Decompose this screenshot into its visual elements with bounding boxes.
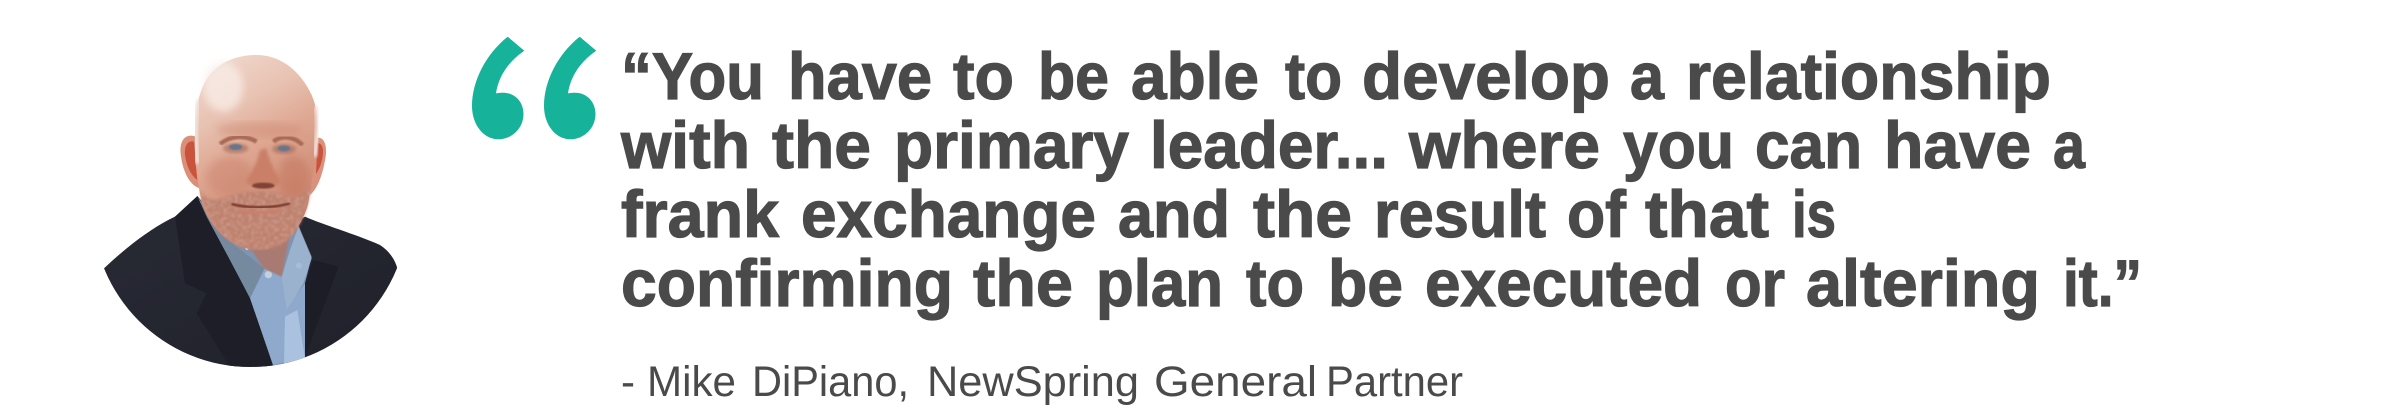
shirt — [197, 197, 312, 367]
quote text: is — [1792, 177, 1836, 251]
attribution: General — [1154, 358, 1317, 406]
quote text: able — [1131, 39, 1259, 113]
eyebrows — [220, 137, 257, 144]
attribution: Mike — [647, 358, 736, 406]
quote text: have — [788, 39, 932, 113]
cheek redness — [207, 157, 253, 197]
quote text: or — [1725, 246, 1785, 320]
scalp highlight — [203, 62, 243, 112]
jacket — [104, 196, 398, 367]
jacket lapel shading — [175, 196, 273, 367]
quote text: the — [973, 246, 1073, 320]
quote text: to — [953, 39, 1014, 113]
attribution: DiPiano, — [752, 358, 909, 406]
quote text: it.” — [2063, 246, 2142, 320]
quote text: a — [2053, 108, 2086, 182]
head — [195, 55, 317, 250]
neck — [250, 238, 290, 277]
portrait: Mike DiPiano — [100, 55, 407, 387]
attribution: Partner — [1326, 358, 1463, 406]
quote text: a — [1630, 39, 1665, 113]
quote text: and — [1118, 177, 1230, 251]
quote text: of — [1567, 177, 1627, 251]
hair fringe — [195, 100, 199, 163]
mouth — [232, 203, 290, 207]
quote text: where — [1408, 108, 1600, 182]
attribution: - — [621, 358, 635, 406]
nose — [246, 148, 281, 188]
quote text: the — [772, 108, 871, 182]
quote text: can — [1755, 108, 1862, 182]
quote text: be — [1038, 39, 1109, 113]
quote text — [620, 39, 2142, 320]
quote text: with — [620, 108, 750, 182]
ears — [180, 136, 200, 188]
eyes — [223, 143, 248, 153]
quote text: “You — [621, 39, 764, 113]
quote text: leader... — [1150, 108, 1388, 182]
quote text: that — [1645, 177, 1769, 251]
quote text: develop — [1362, 39, 1610, 113]
quote text: you — [1623, 108, 1734, 182]
quote text: relationship — [1686, 39, 2051, 113]
quote text: result — [1374, 177, 1546, 251]
quote text: the — [1253, 177, 1352, 251]
quote text: frank — [621, 177, 779, 251]
attribution: NewSpring — [927, 358, 1139, 406]
beard — [200, 185, 310, 249]
quotation mark icon — [472, 37, 596, 139]
quote text: primary — [894, 108, 1129, 182]
quote text: exchange — [801, 177, 1096, 251]
attribution — [621, 358, 1463, 406]
quote text: altering — [1806, 246, 2040, 320]
quote text: to — [1246, 246, 1304, 320]
quote text: plan — [1096, 246, 1223, 320]
quote text: confirming — [621, 246, 953, 320]
quote text: have — [1884, 108, 2031, 182]
quote text: be — [1328, 246, 1403, 320]
quote text: to — [1285, 39, 1342, 113]
quote text: executed — [1425, 246, 1702, 320]
